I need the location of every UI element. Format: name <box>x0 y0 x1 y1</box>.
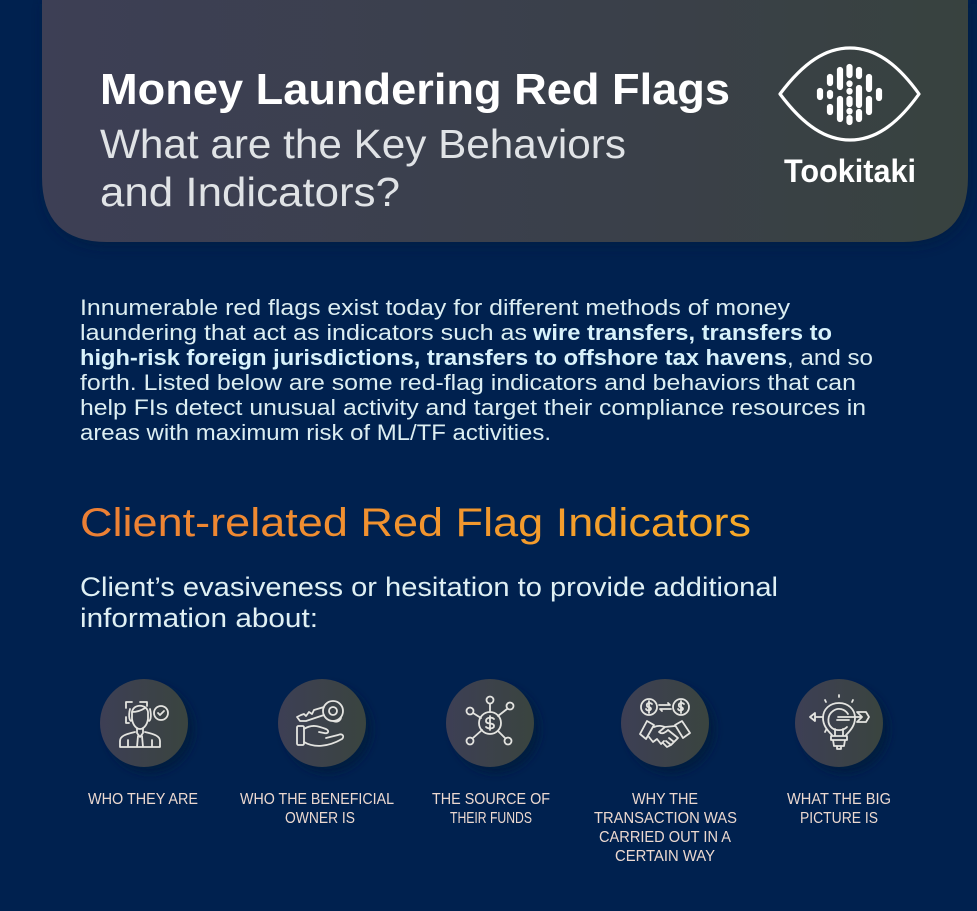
subtitle: What are the Key Behaviors <box>100 121 626 167</box>
icon: key over hand <box>278 679 372 773</box>
label: CARRIED OUT IN A <box>599 829 732 846</box>
icon: eye <box>780 48 919 140</box>
label: THEIR FUNDS <box>450 810 532 827</box>
intro paragraph: areas with maximum risk of ML/TF activities. <box>80 420 551 445</box>
label: TRANSACTION WAS <box>594 810 737 827</box>
intro paragraph: wire transfers, transfers to <box>532 320 832 345</box>
intro paragraph: , and so <box>787 345 873 370</box>
label: WHY THE <box>632 791 698 808</box>
intro paragraph: forth. Listed below are some red-flag indicators and behaviors that can <box>80 370 856 395</box>
section subheading: information about: <box>80 603 318 633</box>
icon: light bulb with arrow <box>795 679 889 773</box>
label <box>240 791 394 827</box>
item: who they are <box>88 679 198 808</box>
label: OWNER IS <box>285 810 355 827</box>
section subheading <box>80 572 778 633</box>
label: PICTURE IS <box>800 810 878 827</box>
label: WHO THE BENEFICIAL <box>240 791 394 808</box>
label <box>432 791 550 827</box>
logo wordmark: Tookitaki <box>784 153 916 189</box>
label: WHO THEY ARE <box>88 791 198 808</box>
logo: Tookitaki <box>780 48 919 189</box>
intro paragraph <box>80 295 873 445</box>
intro paragraph: high-risk foreign jurisdictions, transfers to offshore tax havens <box>80 345 787 370</box>
label: WHAT THE BIG <box>787 791 891 808</box>
subtitle <box>100 121 626 215</box>
label: CERTAIN WAY <box>615 848 715 865</box>
section heading: Client-related Red Flag Indicators <box>80 501 751 545</box>
intro paragraph: laundering that act as indicators such as <box>80 320 527 345</box>
label <box>594 791 737 865</box>
item: why the transaction <box>594 679 737 865</box>
header panel <box>42 0 971 246</box>
title: Money Laundering Red Flags <box>100 65 730 114</box>
intro paragraph: Innumerable red flags exist today for different methods of money <box>80 295 791 320</box>
item: the source of their funds <box>432 679 550 827</box>
icon: person with face scan <box>100 679 194 773</box>
icon: currency exchange handshake <box>621 679 715 773</box>
subtitle: and Indicators? <box>100 169 400 215</box>
item: who the beneficial owner is <box>240 679 394 827</box>
intro paragraph: help FIs detect unusual activity and target their compliance resources in <box>80 395 866 420</box>
label <box>787 791 891 827</box>
icon: dollar network <box>446 679 540 773</box>
label: THE SOURCE OF <box>432 791 550 808</box>
section subheading: Client’s evasiveness or hesitation to provide additional <box>80 572 778 602</box>
item: what the big picture is <box>787 679 891 827</box>
